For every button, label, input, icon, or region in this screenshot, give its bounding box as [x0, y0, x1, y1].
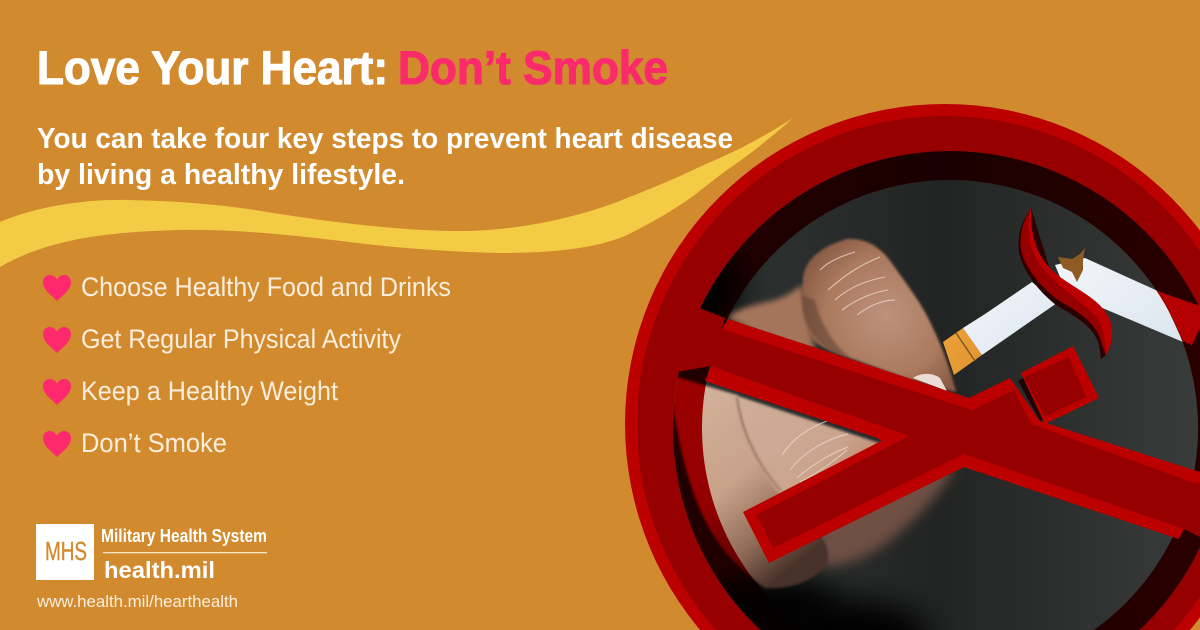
MHS logo [36, 524, 267, 583]
crossed bar [660, 307, 1200, 548]
inner translucent ring [673, 151, 1200, 630]
intro text: You can take four key steps to prevent heart disease [37, 123, 733, 155]
step 1: Choose Healthy Food and Drinks [81, 272, 451, 302]
logo site: health.mil [104, 557, 215, 583]
cigarette body right [1055, 258, 1183, 342]
thumbnail [913, 374, 947, 391]
intro text [37, 123, 733, 191]
logo letters: MHS [45, 536, 87, 566]
heart bullet 3 [43, 379, 71, 405]
title: Love Your Heart: [37, 41, 388, 94]
smoke curl shadow [1018, 208, 1106, 359]
finger crease [737, 397, 781, 491]
finger wrinkles [782, 420, 848, 482]
thumb wrinkles [820, 252, 895, 315]
finger one [670, 375, 828, 588]
right end overlay [1160, 292, 1200, 345]
middle ring [637, 116, 1200, 630]
bar end cap [1021, 346, 1099, 424]
left arm highlight [705, 366, 909, 440]
outer ring [625, 104, 1200, 630]
photo: hand holding broken cigarette [660, 140, 1200, 630]
heart bullet 2 [43, 327, 71, 353]
thumb shadow [802, 295, 850, 358]
heart bullet 1 [43, 275, 71, 301]
step 4: Don’t Smoke [81, 428, 227, 458]
burnt tobacco [1058, 248, 1085, 282]
cigarette filter [943, 328, 982, 375]
logo name: Military Health System [101, 526, 267, 546]
cigarette body left [963, 282, 1057, 355]
bar end shadow [1018, 378, 1043, 421]
photo backdrop [660, 140, 1200, 630]
bar end cap fill [1024, 357, 1086, 417]
filter band [956, 333, 975, 361]
step 2: Get Regular Physical Activity [81, 324, 401, 354]
smoke curl [1020, 208, 1112, 355]
step 3: Keep a Healthy Weight [81, 376, 338, 406]
website url: www.health.mil/hearthealth [36, 592, 238, 611]
intro text: by living a healthy lifestyle. [37, 159, 405, 191]
title highlight: Don’t Smoke [398, 41, 668, 94]
heart bullet 4 [43, 431, 71, 457]
upper bar highlight [722, 319, 1200, 490]
no-smoking graphic [625, 104, 1200, 630]
smoke curl highlight [1028, 208, 1112, 355]
logo box [36, 524, 94, 580]
lower bar highlight [743, 436, 1184, 563]
yellow swoosh [0, 118, 793, 267]
hand back, top [728, 285, 815, 350]
finger two [735, 395, 885, 495]
thumb [802, 239, 956, 392]
list of four steps [43, 272, 451, 458]
third finger, blurred [817, 465, 955, 566]
